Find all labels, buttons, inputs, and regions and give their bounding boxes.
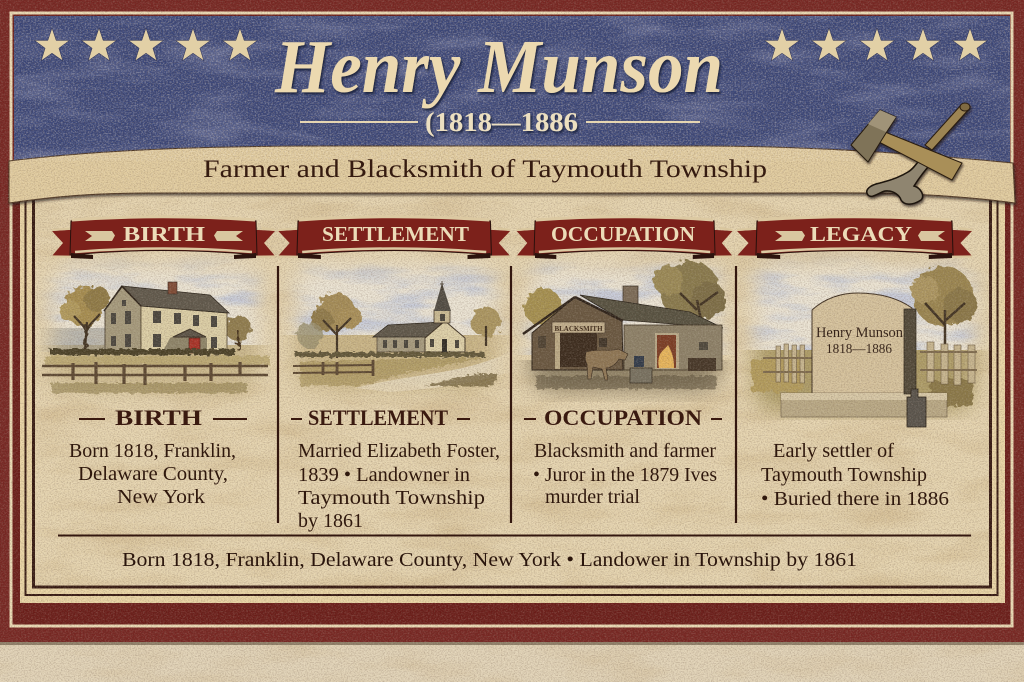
section: occupation: OCCUPATION — [544, 405, 702, 430]
stars: right row — [764, 28, 988, 61]
banner: occupation — [517, 217, 732, 259]
gravestone inscription — [816, 325, 904, 357]
illustration: farmhouse — [34, 256, 271, 396]
banner: birth — [52, 217, 275, 259]
illustration: blacksmith shop with horse — [516, 256, 734, 402]
section: occupation — [524, 405, 722, 508]
horse — [585, 349, 628, 380]
section: birth — [69, 405, 247, 508]
tagline: Farmer and Blacksmith of Taymouth Township — [203, 154, 767, 183]
banner: legacy: LEGACY — [810, 222, 912, 246]
section: occupation: Blacksmith and farmer — [534, 440, 716, 462]
section: legacy — [761, 440, 949, 510]
section: settlement: Married Elizabeth Foster, — [298, 440, 500, 462]
banner: legacy — [737, 217, 972, 259]
footer rule — [58, 534, 971, 536]
section: occupation: murder trial — [545, 486, 640, 508]
banner: occupation: OCCUPATION — [551, 222, 695, 246]
section: settlement: by 1861 — [298, 510, 363, 532]
section: settlement: 1839 • Landowner in — [298, 464, 470, 486]
section: settlement: SETTLEMENT — [308, 405, 448, 430]
banner: tagline ribbon — [9, 146, 1015, 203]
illustration: church and road — [286, 256, 506, 397]
title: Henry Munson — [274, 25, 723, 109]
section: legacy: • Buried there in 1886 — [761, 488, 949, 510]
banner: settlement: SETTLEMENT — [322, 222, 469, 246]
banner: birth: BIRTH — [123, 222, 205, 246]
stars: left row — [34, 28, 258, 61]
icon: hammer and wrench — [851, 103, 970, 204]
section: legacy: Taymouth Township — [761, 464, 927, 486]
section: birth: BIRTH — [115, 405, 202, 430]
illustration: gravestone — [742, 256, 991, 428]
section: settlement: Taymouth Township — [298, 487, 485, 509]
footer summary: Born 1818, Franklin, Delaware County, New York • Landower in Township by 1861 — [122, 549, 857, 571]
gravestone inscription: 1818—1886 — [826, 342, 892, 357]
section: birth: Born 1818, Franklin, — [69, 440, 236, 462]
sign text: BLACKSMITH — [554, 324, 603, 333]
section: occupation: • Juror in the 1879 Ives — [533, 464, 717, 486]
panel: blue header field — [14, 16, 1010, 176]
section: birth: New York — [117, 486, 206, 508]
panel: parchment content area with ruled frame — [20, 180, 1005, 603]
paper mottling — [35, 190, 989, 586]
column dividers — [278, 266, 736, 523]
gravestone inscription: Henry Munson — [816, 325, 904, 341]
section: legacy: Early settler of — [773, 440, 894, 462]
section: birth: Delaware County, — [78, 463, 228, 485]
banner: settlement — [278, 217, 510, 259]
life dates with rules: (1818—1886 — [425, 107, 578, 137]
section: settlement — [291, 405, 500, 532]
